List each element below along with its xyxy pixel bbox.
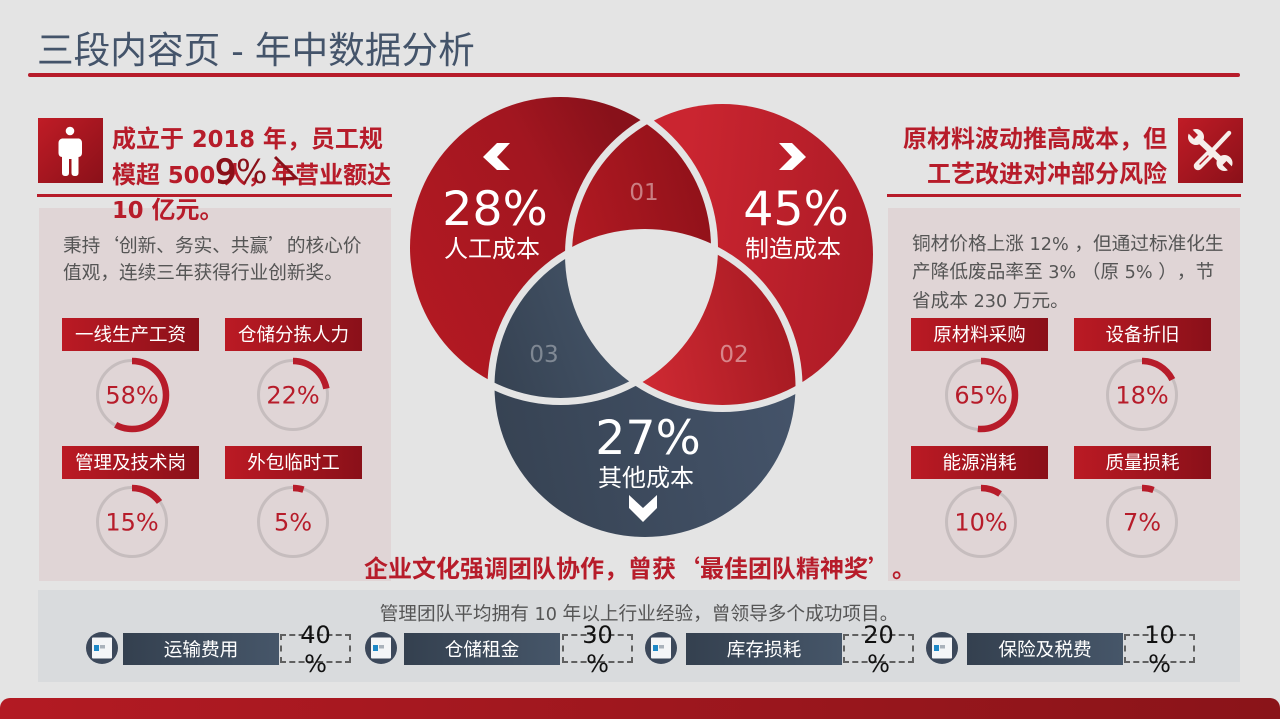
right body text: 省成本 230 万元。 — [912, 291, 1069, 312]
ring chart: 7% — [1106, 484, 1178, 558]
ring chart: 15%: 15% — [105, 508, 159, 536]
callout: team culture: 企业文化强调团队协作，曾获‘最佳团队精神奖’。 — [364, 549, 916, 584]
value box: 10%: 10 — [1144, 621, 1175, 649]
label: 外包临时工: 外包临时工 — [247, 453, 340, 474]
label: 保险及税费 — [967, 633, 1123, 665]
overlapping arrow mark — [274, 156, 300, 180]
bottom text: 管理团队平均拥有 10 年以上行业经验，曾领导多个成功项目。 — [380, 604, 898, 625]
text: % — [867, 650, 890, 678]
title: 三段内容页 - 年中数据分析 — [37, 29, 475, 72]
overlap 01: 01 — [629, 180, 659, 206]
label: 仓储租金: 仓储租金 — [445, 640, 519, 661]
bottom crescent: other cost: 27% — [595, 411, 701, 466]
label: 库存损耗 — [686, 633, 842, 665]
ring chart: 18% — [1106, 358, 1178, 431]
ring chart: 10%: 10% — [954, 508, 1008, 536]
left body text — [63, 231, 362, 284]
ring chart: 22% — [257, 358, 330, 431]
title underline — [28, 73, 1240, 77]
icon: transport — [86, 632, 118, 664]
right crescent: manufacturing cost: 45% — [743, 182, 849, 237]
label: 质量损耗 — [1074, 446, 1211, 479]
label: 原材料采购: 原材料采购 — [933, 325, 1026, 346]
icon: rent — [365, 632, 397, 664]
left crescent: labour cost: 人工成本 — [444, 235, 540, 263]
label: 能源消耗 — [911, 446, 1048, 479]
ring chart: 7%: 7% — [1123, 508, 1161, 536]
bottom crescent: other cost: 其他成本 — [598, 464, 694, 492]
left body text: 秉持‘创新、务实、共赢’的核心价 — [63, 231, 362, 258]
ring chart: 5%: 5% — [274, 508, 312, 536]
label: 设备折旧 — [1074, 318, 1211, 351]
label: 一线生产工资: 一线生产工资 — [75, 325, 186, 346]
value box: 30% — [562, 634, 633, 663]
left heading: 10 亿元。 — [112, 196, 223, 224]
right crescent: manufacturing cost: 制造成本 — [745, 235, 841, 263]
label: 仓储租金 — [404, 633, 560, 665]
ring chart: 65% — [945, 358, 1018, 432]
overlapping 9% figure: 9% — [215, 152, 267, 191]
ring chart: 18%: 18% — [1115, 382, 1169, 410]
ring chart: 5% — [257, 484, 329, 558]
text: % — [586, 650, 609, 678]
left heading: 模超 500 人，年营业额达 — [112, 160, 391, 188]
label: 保险及税费: 保险及税费 — [998, 640, 1092, 661]
left heading: 成立于 2018 年，员工规 — [112, 125, 383, 153]
right body text — [912, 234, 1224, 312]
panel: left background — [39, 208, 391, 581]
label: 一线生产工资 — [62, 318, 199, 351]
right heading: 原材料波动推高成本，但 — [903, 125, 1167, 153]
icon: person — [38, 118, 103, 183]
label: 原材料采购 — [911, 318, 1048, 351]
label: 库存损耗: 库存损耗 — [727, 640, 801, 661]
ring chart: 58%: 58% — [105, 382, 159, 410]
ring chart: 22%: 22% — [266, 382, 320, 410]
overlap 03: 03 — [529, 342, 559, 368]
text: % — [1148, 650, 1171, 678]
right heading: 工艺改进对冲部分风险 — [927, 160, 1167, 188]
value box: 40%: 40 — [300, 621, 331, 649]
right heading — [903, 125, 1167, 188]
overlap 01 — [572, 124, 711, 247]
label: 能源消耗: 能源消耗 — [942, 453, 1016, 474]
text: % — [304, 650, 327, 678]
label: 仓储分拣人力 — [225, 318, 362, 351]
value box: 10% — [1124, 634, 1195, 663]
overlap 03 — [494, 259, 630, 398]
panel: right background — [888, 208, 1240, 581]
label: 运输费用: 运输费用 — [164, 640, 238, 661]
label: 管理及技术岗: 管理及技术岗 — [75, 453, 186, 474]
label: 设备折旧: 设备折旧 — [1105, 325, 1180, 346]
right body text: 铜材价格上涨 12% ，但通过标准化生 — [912, 234, 1224, 255]
value box: 20% — [843, 634, 914, 663]
ring chart: 15% — [96, 484, 168, 558]
panel: bottom strip — [38, 590, 1240, 682]
right body text: 产降低废品率至 3% （原 5% ），节 — [912, 262, 1214, 283]
left crescent: labour cost — [410, 97, 640, 380]
left crescent: labour cost: 28% — [442, 182, 548, 237]
ring chart: 65%: 65% — [954, 382, 1008, 410]
overlap 02 — [642, 254, 796, 405]
icon: inventory — [645, 632, 677, 664]
label: 运输费用 — [123, 633, 279, 665]
icon: tools — [1178, 118, 1243, 183]
left body text: 值观，连续三年获得行业创新奖。 — [63, 263, 343, 284]
value box: 40% — [280, 634, 351, 663]
label: 质量损耗: 质量损耗 — [1105, 453, 1180, 474]
icon: insurance — [926, 632, 958, 664]
right heading rule — [887, 194, 1241, 196]
left heading — [112, 125, 391, 224]
right crescent: manufacturing cost — [654, 104, 873, 382]
label: 仓储分拣人力: 仓储分拣人力 — [238, 325, 349, 346]
venn diagram — [410, 97, 873, 537]
bottom crescent: other cost — [494, 386, 796, 537]
ring chart: 10% — [945, 484, 1017, 558]
value box: 20%: 20 — [863, 621, 894, 649]
footer bar — [0, 698, 1280, 719]
overlap 02: 02 — [719, 342, 749, 368]
ring chart: 58% — [96, 358, 170, 432]
left heading rule — [37, 194, 392, 196]
value box: 30%: 30 — [582, 621, 613, 649]
label: 外包临时工 — [225, 446, 362, 479]
label: 管理及技术岗 — [62, 446, 199, 479]
